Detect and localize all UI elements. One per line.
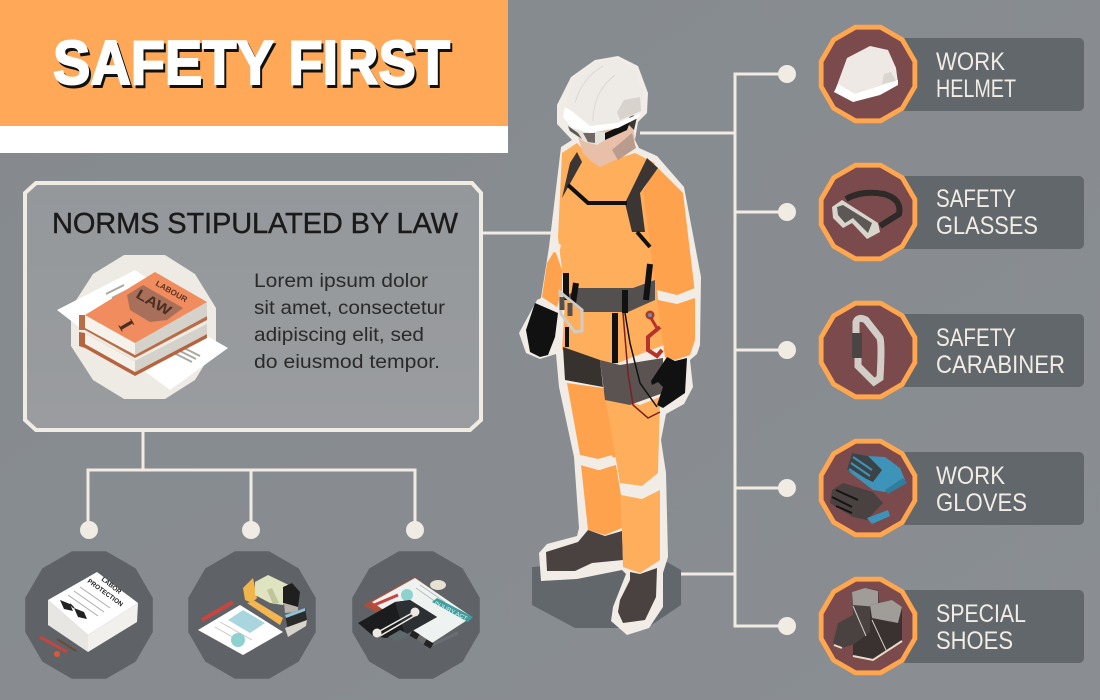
icon: labour law books [57, 255, 228, 399]
item: safety glasses: GLASSES [936, 212, 1038, 240]
icon: labor protection documents [25, 551, 153, 679]
item: safety carabiner [819, 301, 1084, 399]
item: work helmet: WORK [936, 48, 1005, 76]
title banner: SAFETY FIRST [53, 29, 450, 98]
item: work helmet [819, 25, 1084, 123]
icon: labour law books: LABOUR [154, 279, 189, 304]
icon: labour law books: LAW [134, 286, 175, 319]
item: safety carabiner: CARABINER [936, 351, 1065, 379]
icon: injury act documents [352, 551, 480, 679]
panel body text [254, 270, 446, 373]
icon: stamp and money documents [188, 551, 316, 679]
figure arm left [542, 250, 562, 307]
title banner: SAFETY FIRST [55, 32, 452, 101]
panel body text: do eiusmod tempor. [254, 351, 440, 373]
figure right glove [651, 357, 687, 408]
item: safety glasses: SAFETY [936, 185, 1016, 213]
panel: norms stipulated by law [25, 183, 481, 430]
item: safety glasses [819, 163, 1084, 261]
panel heading: NORMS STIPULATED BY LAW [52, 208, 459, 240]
item: work gloves: GLOVES [936, 489, 1027, 517]
panel body text: Lorem ipsum dolor [254, 270, 429, 292]
figure harness [562, 152, 658, 363]
safety lanyard wires [623, 313, 660, 418]
leg reflective band [580, 455, 614, 470]
figure: worker in protective gear [519, 56, 701, 635]
figure helmet [563, 59, 643, 133]
item: special shoes [819, 577, 1084, 675]
connector dots: right tree [778, 65, 796, 635]
icon: goggles [832, 193, 899, 239]
arm reflective band [657, 288, 695, 304]
item: work gloves: WORK [936, 462, 1005, 490]
icon: injury act documents: INJURY ACT [433, 600, 469, 622]
figure outline [519, 56, 701, 635]
panel body text: adipiscing elit, sed [254, 324, 424, 346]
item: work helmet: HELMET [936, 75, 1016, 103]
figure arm right [643, 167, 695, 360]
icon: labor protection documents: PROTECTION [86, 578, 124, 608]
item: safety carabiner: SAFETY [936, 324, 1016, 352]
ground shadow [532, 562, 681, 628]
carabiner on belt [560, 292, 582, 332]
figure left leg [546, 383, 623, 571]
figure torso [558, 143, 664, 366]
icon: carabiner [852, 318, 881, 382]
connector dots: left tree [80, 521, 424, 539]
item: special shoes: SHOES [936, 627, 1013, 655]
panel body text: sit amet, consectetur [254, 297, 446, 319]
figure right leg [605, 395, 662, 623]
figure left glove [526, 303, 558, 357]
icon: labor protection documents: LABOR [100, 576, 123, 596]
item: special shoes: SPECIAL [936, 600, 1026, 628]
icon: gloves [830, 453, 907, 524]
icon: helmet [834, 46, 898, 102]
title banner [0, 0, 508, 153]
icon: labour law books: I [114, 315, 140, 335]
figure thigh pouches [563, 347, 663, 405]
item: work gloves [819, 439, 1084, 537]
icon: boots [833, 588, 902, 660]
figure head [568, 114, 637, 167]
red hook [648, 327, 662, 356]
